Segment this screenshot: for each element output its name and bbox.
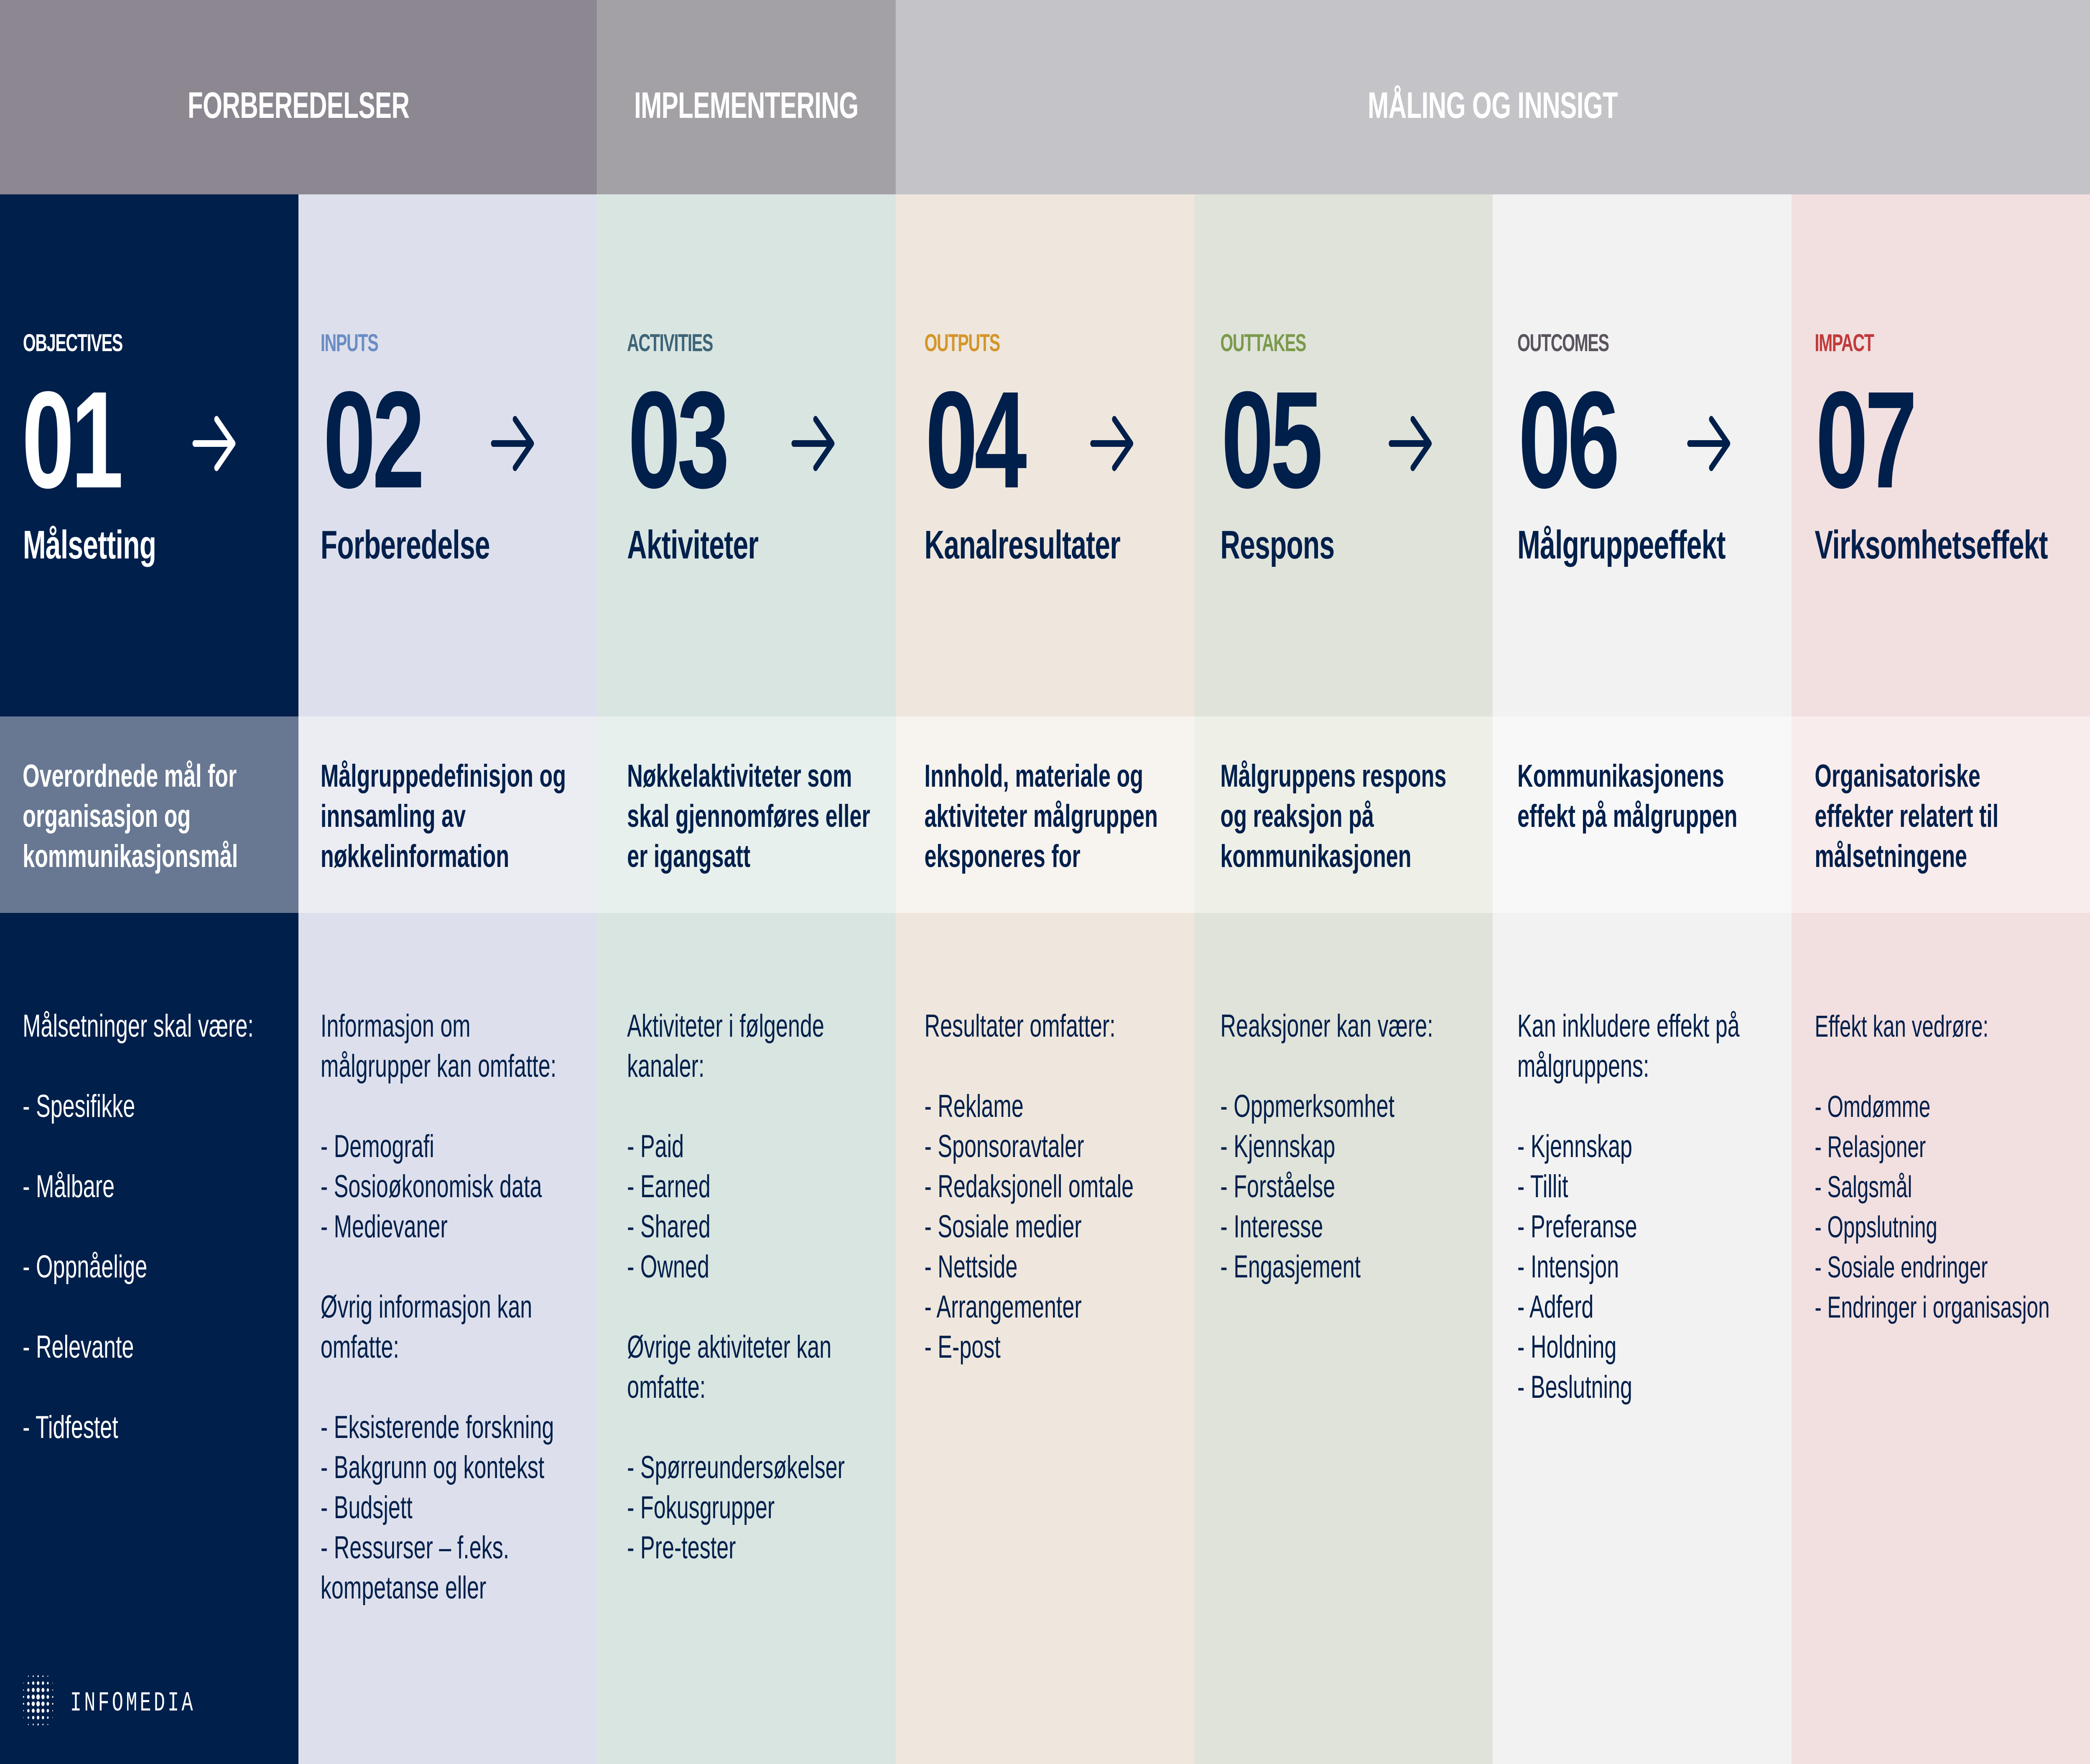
body list: Reaksjoner kan være: — [1220, 1008, 1433, 1043]
body list: målgruppens: — [1517, 1048, 1649, 1083]
body list: - Demografi — [321, 1128, 434, 1164]
body list: - Shared — [627, 1208, 711, 1244]
logo: Infomedia: INFOMEDIA — [70, 1688, 196, 1719]
description band — [597, 716, 896, 913]
label: ACTIVITIES: ACTIVITIES — [627, 329, 713, 357]
header: IMPLEMENTERING — [597, 0, 896, 194]
body list: - Relasjoner — [1815, 1130, 1926, 1164]
body list: Målsetninger skal være: — [23, 1008, 254, 1043]
body list: - Forståelse — [1220, 1168, 1335, 1204]
arrow — [195, 419, 233, 468]
body list: - Engasjement — [1220, 1249, 1361, 1284]
description band: innsamling av — [321, 798, 466, 834]
title: Respons: Respons — [1220, 523, 1334, 567]
description band: kommunikasjonsmål — [23, 838, 238, 874]
panel: inputs — [298, 194, 597, 1764]
description band: Overordnede mål for — [23, 758, 237, 793]
description band: Målgruppens respons — [1220, 758, 1446, 793]
arrow — [1690, 419, 1728, 468]
description band: Kommunikasjonens — [1517, 758, 1724, 793]
description band: kommunikasjonen — [1220, 838, 1412, 874]
body list: kompetanse eller — [321, 1570, 486, 1605]
title: Kanalresultater: Kanalresultater — [924, 523, 1120, 567]
title: Aktiviteter: Aktiviteter — [627, 523, 758, 567]
label: INPUTS: INPUTS — [321, 329, 378, 357]
label: OUTCOMES: OUTCOMES — [1517, 329, 1609, 357]
body list: Aktiviteter i følgende — [627, 1008, 824, 1043]
panel: outputs — [896, 194, 1194, 1764]
body list: - Sponsoravtaler — [924, 1128, 1084, 1164]
body list: - Kjennskap — [1517, 1128, 1632, 1164]
body list: Effekt kan vedrøre: — [1815, 1010, 1988, 1043]
header: IMPLEMENTERING: IMPLEMENTERING — [634, 85, 858, 126]
body list: - Earned — [627, 1168, 711, 1204]
body list: - Kjennskap — [1220, 1128, 1335, 1164]
body list: omfatte: — [627, 1369, 706, 1405]
body list: - Tillit — [1517, 1168, 1568, 1204]
number 05: 05 — [1221, 362, 1320, 517]
description band: og reaksjon på — [1220, 798, 1374, 834]
number 03: 03 — [628, 362, 727, 517]
header: MÅLING OG INNSIGT: MÅLING OG INNSIGT — [1368, 85, 1618, 126]
body list: - Eksisterende forskning — [321, 1409, 554, 1445]
body list: - Oppslutning — [1815, 1211, 1937, 1244]
description band — [1194, 716, 1493, 913]
body list: - Arrangementer — [924, 1289, 1082, 1324]
arrow — [493, 419, 532, 468]
body list: - Oppmerksomhet — [1220, 1088, 1394, 1124]
body list: - Fokusgrupper — [627, 1489, 775, 1525]
body list: - Paid — [627, 1128, 684, 1164]
number 01: 01 — [22, 362, 121, 517]
header: FORBEREDELSER: FORBEREDELSER — [188, 85, 409, 126]
body list: - Adferd — [1517, 1289, 1593, 1324]
label: OUTTAKES: OUTTAKES — [1220, 329, 1306, 357]
body list: - Preferanse — [1517, 1208, 1637, 1244]
arrow — [794, 419, 832, 468]
body list: - Målbare — [23, 1168, 115, 1204]
body list: Resultater omfatter: — [924, 1008, 1116, 1043]
body list: - Interesse — [1220, 1208, 1323, 1244]
description band — [0, 716, 298, 913]
number 02: 02 — [323, 362, 423, 517]
body list: - Holdning — [1517, 1329, 1616, 1364]
panel: objectives — [0, 194, 298, 1764]
label: OUTPUTS: OUTPUTS — [924, 329, 1000, 357]
description band: målsetningene — [1815, 838, 1967, 874]
body list: - Owned — [627, 1249, 709, 1284]
title: Virksomhetseffekt: Virksomhetseffekt — [1815, 523, 2048, 567]
description band: Innhold, materiale og — [924, 758, 1143, 793]
body list: - Spørreundersøkelser — [627, 1449, 845, 1485]
title: Forberedelse: Forberedelse — [321, 523, 490, 567]
description band: organisasjon og — [23, 798, 191, 834]
body list: - Omdømme — [1815, 1090, 1930, 1124]
body list: - Pre-tester — [627, 1529, 736, 1565]
body list: omfatte: — [321, 1329, 399, 1364]
body list: Kan inkludere effekt på — [1517, 1008, 1740, 1043]
body list: - Nettside — [924, 1249, 1017, 1284]
body list: - Endringer i organisasjon — [1815, 1291, 2050, 1324]
panel: impact — [1792, 194, 2090, 1764]
description band: aktiviteter målgruppen — [924, 798, 1158, 834]
body list: målgrupper kan omfatte: — [321, 1048, 556, 1083]
arrow — [1093, 419, 1131, 468]
description band: effekter relatert til — [1815, 798, 1998, 834]
description band: nøkkelinformation — [321, 838, 509, 874]
number 04: 04 — [925, 362, 1027, 517]
body list: - Sosioøkonomisk data — [321, 1168, 542, 1204]
body list: - Bakgrunn og kontekst — [321, 1449, 544, 1485]
body list: - Relevante — [23, 1329, 134, 1364]
body list: - Ressurser – f.eks. — [321, 1529, 509, 1565]
body list: - Reklame — [924, 1088, 1024, 1124]
body list: - Sosiale medier — [924, 1208, 1082, 1244]
logo: Infomedia — [23, 1675, 196, 1726]
body list: - Oppnåelige — [23, 1249, 147, 1284]
panel: outtakes — [1194, 194, 1493, 1764]
title: Målgruppeeffekt: Målgruppeeffekt — [1517, 523, 1726, 567]
description band: effekt på målgruppen — [1517, 798, 1738, 834]
body list: - Sosiale endringer — [1815, 1251, 1988, 1284]
body list: - Budsjett — [321, 1489, 413, 1525]
description band — [1493, 716, 1792, 913]
body list: - E-post — [924, 1329, 1001, 1364]
description band — [1792, 716, 2090, 913]
title: Målsetting: Målsetting — [23, 523, 156, 567]
arrow — [1391, 419, 1430, 468]
description band: Nøkkelaktiviteter som — [627, 758, 852, 793]
body list: - Salgsmål — [1815, 1170, 1912, 1204]
body list: Informasjon om — [321, 1008, 471, 1043]
label: OBJECTIVES: OBJECTIVES — [23, 329, 122, 357]
description band: er igangsatt — [627, 838, 750, 874]
panel: outcomes — [1493, 194, 1792, 1764]
body list: - Redaksjonell omtale — [924, 1168, 1134, 1204]
description band: skal gjennomføres eller — [627, 798, 870, 834]
body list: Øvrige aktiviteter kan — [627, 1329, 831, 1364]
header: FORBEREDELSER — [0, 0, 597, 194]
description band: Målgruppedefinisjon og — [321, 758, 566, 793]
description band — [298, 716, 597, 913]
body list: - Medievaner — [321, 1208, 448, 1244]
body list: - Intensjon — [1517, 1249, 1619, 1284]
body list: - Beslutning — [1517, 1369, 1632, 1405]
body list: - Spesifikke — [23, 1088, 135, 1124]
description band: Organisatoriske — [1815, 758, 1980, 793]
label: IMPACT: IMPACT — [1815, 329, 1874, 357]
header: MÅLING OG INNSIGT — [896, 0, 2090, 194]
number 07: 07 — [1815, 362, 1914, 517]
body list: - Tidfestet — [23, 1409, 118, 1445]
panel: activities — [597, 194, 896, 1764]
body list: kanaler: — [627, 1048, 704, 1083]
body list: Øvrig informasjon kan — [321, 1289, 532, 1324]
number 06: 06 — [1518, 362, 1618, 517]
description band — [896, 716, 1194, 913]
description band: eksponeres for — [924, 838, 1081, 874]
